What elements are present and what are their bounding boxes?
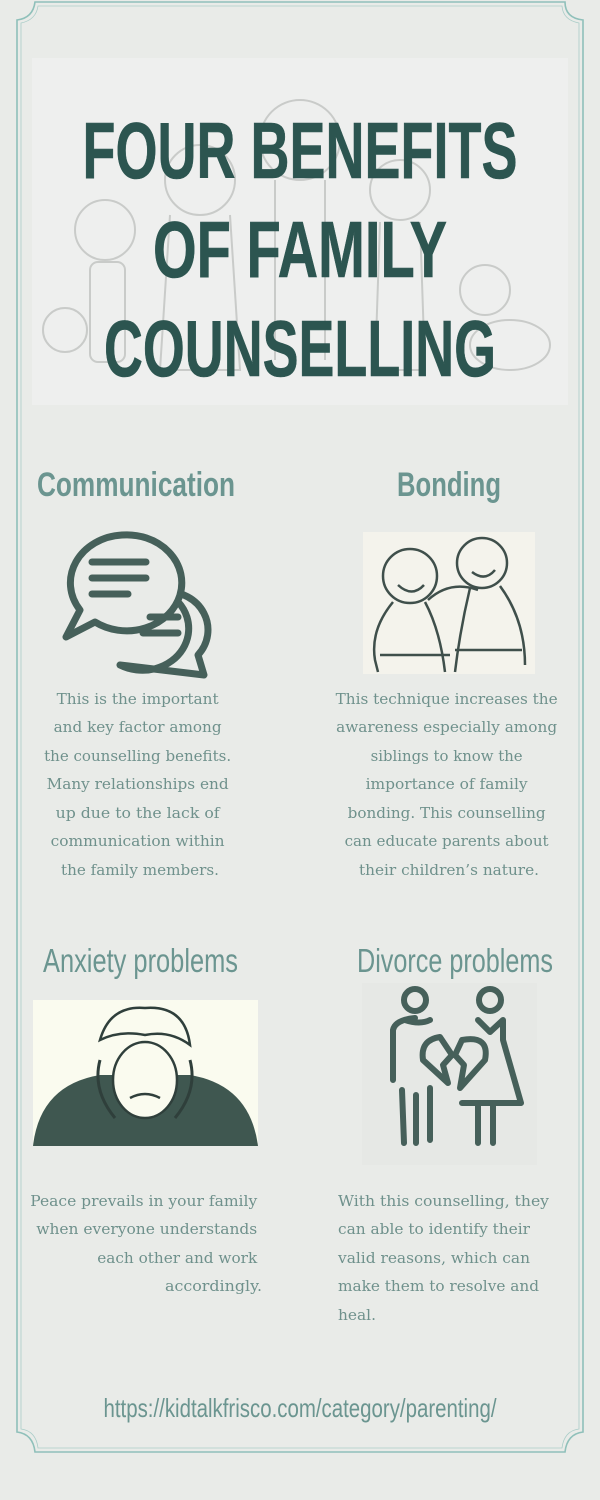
title panel: OF FAMILY [153,205,447,294]
panel: anxiety: each other and work [97,1249,258,1267]
panel: communication [37,466,236,879]
panel: bonding: their children’s nature. [359,861,539,879]
icon: speech bubbles [66,535,208,675]
panel: bonding: can educate parents about [345,832,549,850]
panel: anxiety: when everyone understands [36,1220,257,1238]
panel: communication: communication within [51,832,225,850]
panel: communication: the family members. [61,861,219,879]
panel: communication: Many relationships end [47,775,229,793]
panel: anxiety: Anxiety problems [43,942,238,979]
panel: bonding: siblings to know the [371,747,523,765]
panel: divorce: can able to identify their [338,1220,531,1238]
title panel [32,58,568,405]
panel: anxiety [30,942,262,1295]
panel: anxiety: Peace prevails in your family [30,1192,258,1210]
panel: divorce [337,942,554,1324]
panel: bonding: awareness especially among [336,718,558,736]
panel: communication: and key factor among [54,718,222,736]
icon: two friends [363,532,535,674]
panel: communication: up due to the lack of [56,804,221,822]
panel: bonding: This technique increases the [336,690,558,708]
panel: bonding [336,466,562,879]
panel: divorce: make them to resolve and [338,1277,539,1295]
background sketch of family [43,100,550,370]
panel: divorce: With this counselling, they [338,1192,550,1210]
panel: communication: the counselling benefits. [44,747,231,765]
panel: anxiety: accordingly. [165,1277,262,1295]
panel: bonding: importance of family [366,775,528,793]
panel: bonding: Bonding [397,466,501,504]
icon: anxious man [33,1000,258,1146]
panel: divorce: valid reasons, which can [337,1249,530,1267]
panel: divorce: heal. [338,1306,376,1324]
source url: https://kidtalkfrisco.com/category/parenting/ [104,1393,497,1423]
icon: couple with broken heart [362,983,537,1165]
panel: communication: Communication [37,466,235,504]
panel: bonding: bonding. This counselling [348,804,546,822]
panel: communication: This is the important [57,690,219,708]
